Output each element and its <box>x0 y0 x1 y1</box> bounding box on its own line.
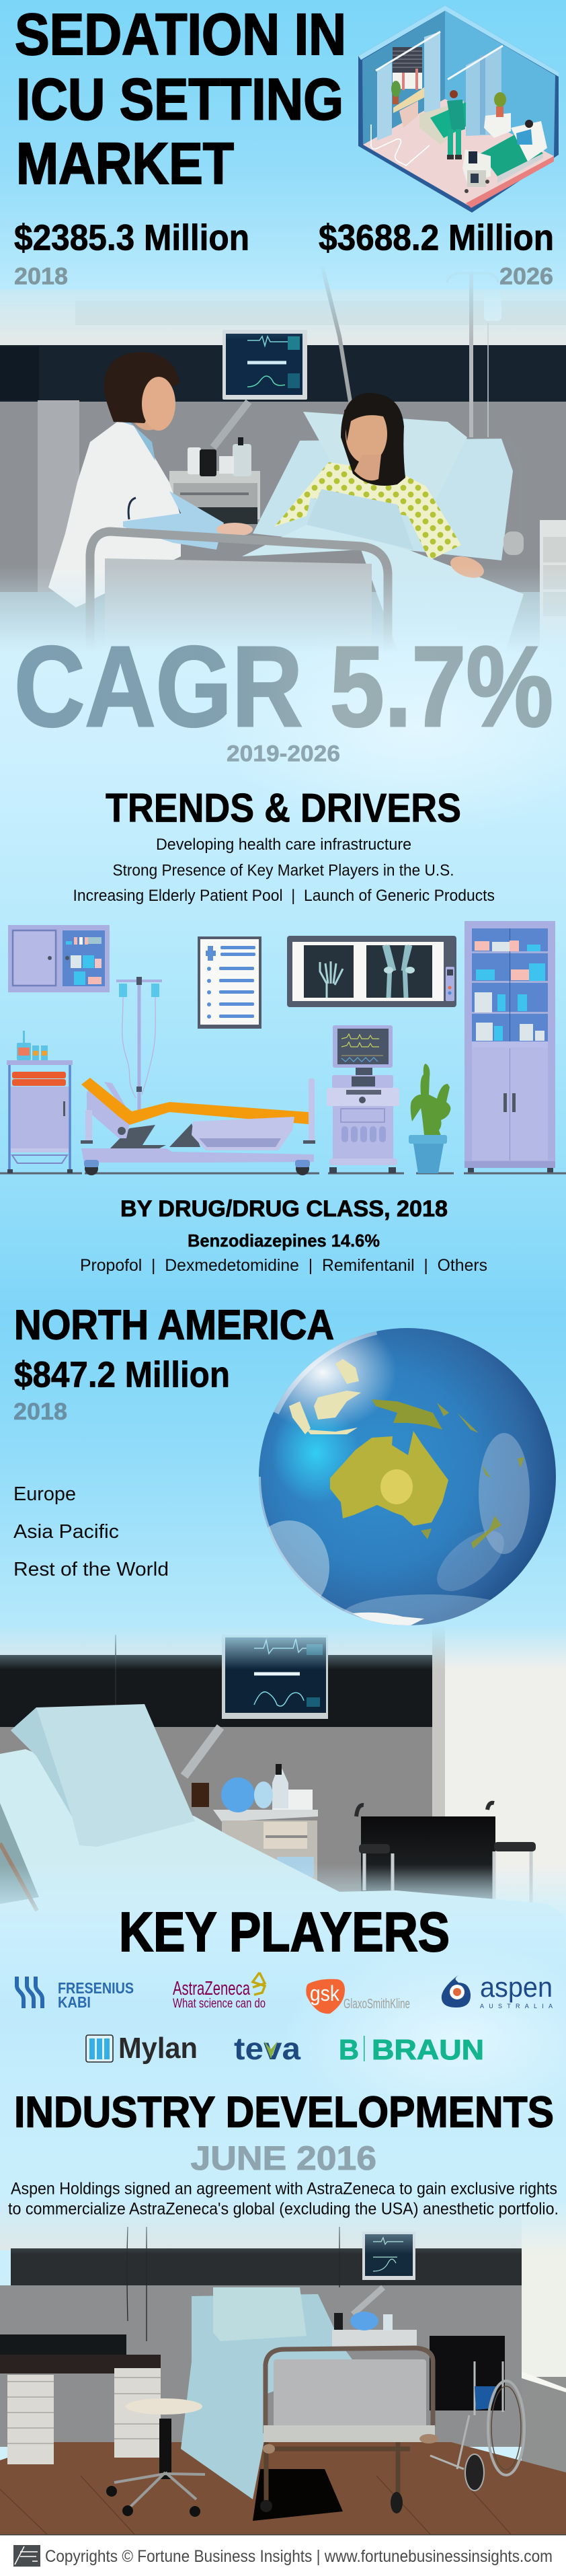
nurse <box>447 90 465 159</box>
logo: fresenius kabi <box>17 1977 134 2011</box>
illustration: hospital ward equipment <box>0 921 566 1175</box>
patient <box>274 393 461 560</box>
logo: b braun: B <box>339 2034 359 2065</box>
trends list: Strong Presence of Key Market Players in the U.S. <box>113 861 454 880</box>
monitor <box>222 1635 328 1719</box>
development description <box>8 2180 559 2219</box>
logo: astrazeneca: What science can do <box>173 1997 266 2011</box>
drawer units <box>7 2368 161 2464</box>
iv poles <box>322 273 501 437</box>
right bedside cabinet <box>540 520 566 639</box>
land: southeast asia <box>289 1359 361 1434</box>
bedside monitor <box>223 330 307 400</box>
logo: astrazeneca <box>173 1973 266 2011</box>
side table and plant <box>391 81 424 128</box>
patient bed mattress <box>253 439 513 560</box>
illustration: isometric ICU room <box>358 5 559 213</box>
medical chart <box>198 936 261 1029</box>
logo: fresenius kabi: KABI <box>58 1993 91 2011</box>
drug class section: Propofol | Dexmedetomidine | Remifentanil | Others <box>80 1256 487 1275</box>
photo: empty bed, monitor and wheelchair <box>0 1615 566 1924</box>
stat: 2026 market value <box>319 218 554 289</box>
wall outlets and cables <box>127 2227 339 2341</box>
wood floor <box>0 2442 566 2534</box>
logo: glaxosmithkline: GlaxoSmithKline <box>343 1997 410 2012</box>
other regions list: Europe <box>13 1483 76 1505</box>
trends list: Increasing Elderly Patient Pool | Launch of Generic Products <box>73 887 495 905</box>
logo: fresenius kabi: FRESENIUS <box>58 1979 134 1997</box>
drug class section: BY DRUG/DRUG CLASS, 2018 <box>120 1196 448 1222</box>
footboard <box>260 2348 438 2513</box>
blanket <box>242 525 524 638</box>
pillow <box>213 2287 307 2341</box>
hospital bed <box>81 1078 315 1175</box>
ultrasound cart <box>462 149 491 193</box>
title: SEDATION IN <box>15 2 346 67</box>
bed sheet <box>181 2294 354 2499</box>
logo: glaxosmithkline <box>306 1979 410 2014</box>
supply cart <box>169 437 260 524</box>
bed mattress <box>0 1749 566 1924</box>
pillow <box>11 1704 195 1847</box>
tall medicine cabinet <box>464 921 555 1173</box>
stat: 2026 market value: 2026 <box>499 264 553 289</box>
stat: 2018 market value <box>14 218 249 289</box>
antarctica <box>352 1613 424 1625</box>
monitor arm <box>184 1727 220 1776</box>
floor shadow <box>253 2469 343 2521</box>
supply cart and mask <box>192 1764 318 1881</box>
regional section: north america: 2018 <box>13 1399 67 1425</box>
logo: teva: teva <box>234 2031 300 2066</box>
window <box>393 47 422 90</box>
bed frame legs <box>264 2442 410 2501</box>
land: new guinea <box>372 1399 442 1430</box>
back bed <box>419 101 466 145</box>
regional section: north america <box>13 1302 334 1425</box>
potted plant <box>409 1064 450 1173</box>
footer <box>0 2534 566 2576</box>
other regions list: Rest of the World <box>13 1559 169 1580</box>
photo: hospital room with bed, stool and wheelchair <box>0 2197 566 2536</box>
logo: astrazeneca: AstraZeneca <box>173 1978 251 1999</box>
wall cabinet <box>8 925 110 992</box>
doctor <box>48 352 253 608</box>
monitor arm <box>213 402 249 447</box>
stool <box>106 2398 205 2517</box>
logo: mylan <box>86 2032 198 2065</box>
desk with clutter <box>0 2334 161 2373</box>
date: june 2016: JUNE 2016 <box>191 2139 376 2177</box>
trends list: Developing health care infrastructure <box>156 836 411 854</box>
photo: doctor and patient in ICU room <box>0 249 566 659</box>
globe <box>259 1328 556 1625</box>
x-ray viewer <box>287 936 456 1007</box>
footer logo <box>13 2545 40 2567</box>
bedside cart <box>332 2312 417 2348</box>
heading: key players: KEY PLAYERS <box>119 1901 450 1963</box>
footboard <box>105 558 372 616</box>
trends list <box>73 836 495 905</box>
nightstand and plant <box>484 92 511 138</box>
CAGR figure: 2019-2026 <box>227 741 340 767</box>
floor lines <box>0 1172 566 1175</box>
drug class section <box>80 1196 487 1275</box>
other regions list: Asia Pacific <box>13 1521 119 1543</box>
curtains <box>376 32 503 141</box>
logo: mylan: Mylan <box>118 2032 198 2065</box>
patient bed <box>481 120 547 183</box>
logo: aspen australia: aspen <box>480 1971 553 2003</box>
title <box>15 2 346 196</box>
logo: aspen australia <box>442 1971 553 2010</box>
logo: glaxosmithkline: gsk <box>310 1981 340 2005</box>
regional section: north america: $847.2 Million <box>14 1355 230 1395</box>
wheelchair <box>356 1803 536 1904</box>
land: new zealand and islands <box>421 1403 524 1549</box>
stat: 2018 market value: $2385.3 Million <box>14 218 249 258</box>
land: australia <box>330 1431 448 1526</box>
title: MARKET <box>16 131 234 196</box>
logo: b braun: BRAUN <box>372 2034 484 2065</box>
stat: 2018 market value: 2018 <box>14 264 68 289</box>
heading: trends and drivers: TRENDS & DRIVERS <box>106 786 461 830</box>
title: ICU SETTING <box>16 67 343 132</box>
patient hand <box>450 556 484 578</box>
regional section: north america: NORTH AMERICA <box>14 1302 334 1348</box>
monitor <box>362 2232 415 2280</box>
drug class section: Benzodiazepines 14.6% <box>188 1230 380 1251</box>
front bed rail <box>90 531 388 653</box>
pillow <box>303 412 467 441</box>
wheelchair <box>430 2336 524 2491</box>
ultrasound machine <box>327 1025 399 1173</box>
iv stand <box>116 977 162 1110</box>
bedside cart with bottles <box>7 1031 73 1173</box>
other regions list <box>13 1483 169 1580</box>
logo: aspen australia: AUSTRALIA <box>480 2003 553 2010</box>
